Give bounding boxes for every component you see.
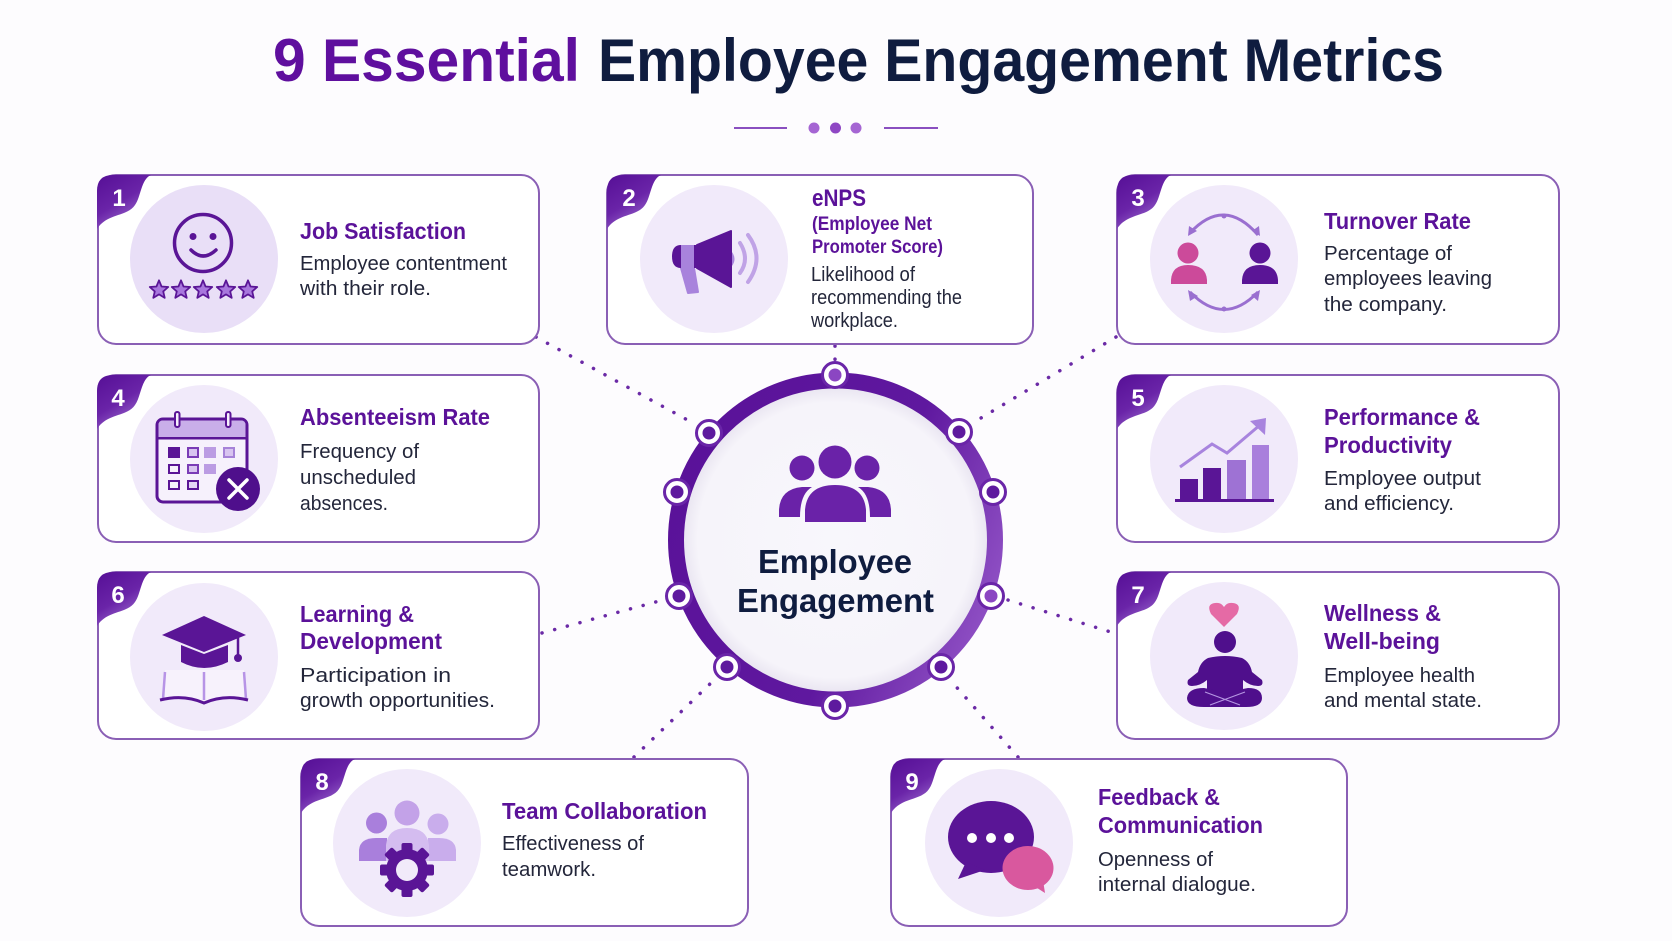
badge 9 [891, 759, 945, 813]
text: Feedback & Communication: internal dialogue. [1098, 874, 1256, 896]
icon: calendar with x badge [157, 412, 260, 511]
text: Wellness & Well-being: Well-being [1324, 628, 1440, 654]
text: Wellness & Well-being [1324, 600, 1482, 712]
panel: 5 Performance & Productivity [1117, 375, 1559, 542]
badge 1 [97, 175, 151, 229]
text: Absenteeism Rate: Absenteeism Rate [300, 404, 490, 430]
icon: team with gear [359, 800, 456, 897]
title [273, 27, 1444, 94]
text: Turnover Rate: Percentage of [1324, 243, 1452, 265]
badge 6: 6 [111, 582, 125, 609]
badge 7: 7 [1131, 582, 1145, 609]
text: Team Collaboration [502, 798, 707, 881]
badge 4 [97, 375, 151, 429]
badge 7 [1117, 572, 1171, 626]
text: Wellness & Well-being: Employee health [1324, 665, 1475, 687]
text: Feedback & Communication: Communication [1098, 812, 1263, 838]
text: eNPS: recommending the [811, 287, 962, 309]
hub label: Engagement [737, 582, 934, 619]
dotted connectors [536, 337, 1116, 757]
text: Feedback & Communication [1098, 784, 1263, 896]
hub label: Employee [758, 543, 912, 580]
badge 3: 3 [1131, 185, 1145, 212]
panel: 4 Absenteeism Rate [97, 375, 539, 542]
text: Team Collaboration: Team Collaboration [502, 798, 707, 824]
text: Performance & Productivity: and efficiency. [1324, 493, 1454, 515]
icon: chat bubbles [948, 801, 1054, 893]
text: Feedback & Communication: Feedback & [1098, 784, 1220, 810]
text: eNPS: (Employee Net [812, 214, 933, 235]
text: Absenteeism Rate: Frequency of [300, 441, 419, 463]
badge 1: 1 [112, 185, 126, 212]
text: Performance & Productivity: Performance & [1324, 404, 1480, 430]
badge 5: 5 [1131, 385, 1145, 412]
icon: growth bar chart [1175, 418, 1274, 502]
icon: meditating person with heart [1187, 603, 1262, 707]
panel: 2 eNPS [607, 175, 1033, 344]
text: Job Satisfaction [299, 218, 507, 300]
title: Employee Engagement Metrics [598, 27, 1444, 94]
panel: 8 Team Collaboration [301, 759, 748, 926]
text: Learning & Development [300, 601, 495, 712]
badge 8: 8 [315, 769, 329, 796]
text: Team Collaboration: Effectiveness of [502, 833, 644, 855]
text: Turnover Rate: employees leaving [1324, 268, 1492, 290]
text: eNPS: Likelihood of [811, 264, 915, 286]
text: Performance & Productivity: Productivity [1324, 432, 1452, 458]
text: Turnover Rate [1324, 208, 1492, 316]
panel: 7 Wellness & Well-being [1117, 572, 1559, 739]
badge 6 [97, 572, 151, 626]
badge 4: 4 [111, 385, 125, 412]
badge 9: 9 [905, 769, 919, 796]
text: Absenteeism Rate: unscheduled [300, 467, 416, 489]
text: Turnover Rate: Turnover Rate [1324, 208, 1471, 234]
text: Learning & Development: growth opportunities. [300, 690, 495, 712]
title: 9 Essential [273, 27, 580, 94]
panel: 6 Learning & Development [97, 572, 539, 739]
text: eNPS: Promoter Score) [812, 237, 943, 258]
panel: 9 Feedback & Communication [891, 759, 1347, 926]
hub label [737, 543, 934, 619]
badge 2 [607, 175, 661, 229]
text: Job Satisfaction: Job Satisfaction [300, 218, 466, 244]
text: eNPS [810, 185, 962, 332]
text: Absenteeism Rate: absences. [300, 493, 388, 515]
text: Team Collaboration: teamwork. [502, 859, 596, 881]
text: Turnover Rate: the company. [1324, 294, 1447, 316]
text: Wellness & Well-being: Wellness & [1324, 600, 1441, 626]
text: Performance & Productivity: Employee output [1324, 468, 1481, 490]
title divider with dots [734, 122, 938, 134]
icon: people group [779, 446, 891, 522]
text: Learning & Development: Participation in [300, 665, 451, 687]
text: Job Satisfaction: with their role. [299, 278, 431, 300]
text: eNPS: eNPS [812, 185, 866, 212]
text: Job Satisfaction: Employee contentment [300, 253, 507, 275]
badge 5 [1117, 375, 1171, 429]
text: Learning & Development: Development [300, 628, 442, 654]
central hub: Employee Engagement [664, 362, 1006, 718]
text: Absenteeism Rate [300, 404, 490, 515]
text: Learning & Development: Learning & [300, 601, 414, 627]
badge 3 [1117, 175, 1171, 229]
badge 2: 2 [622, 185, 636, 212]
text: eNPS: workplace. [810, 310, 898, 332]
icon: megaphone [672, 231, 756, 293]
text: Wellness & Well-being: and mental state. [1324, 690, 1482, 712]
icon: turnover people and arrows [1171, 214, 1278, 312]
panel: 3 Turnover Rate [1117, 175, 1559, 344]
icon: smiley with stars [150, 214, 257, 298]
badge 8 [301, 759, 355, 813]
icon: graduation cap and book [160, 616, 248, 703]
text: Performance & Productivity [1324, 404, 1481, 515]
panel: 1 Job Satisfaction [97, 175, 539, 344]
text: Feedback & Communication: Openness of [1098, 849, 1213, 871]
